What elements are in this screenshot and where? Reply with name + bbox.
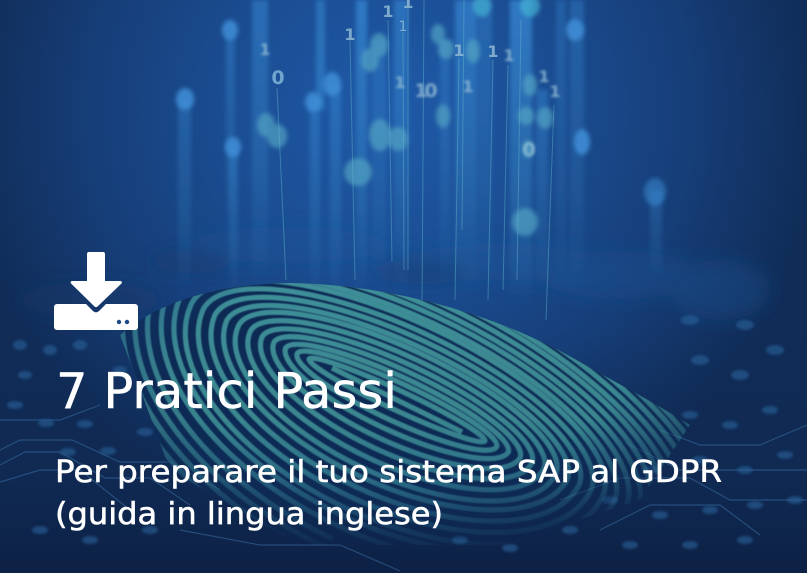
subtitle [55, 455, 722, 532]
binary digits: 1 [394, 73, 406, 92]
binary digits: 0 [271, 67, 285, 89]
binary digits: 1 [549, 82, 561, 101]
blurred landscape behind the fingerprint [20, 227, 770, 320]
thin fibre lines [277, 0, 554, 320]
glowing vertical light columns [178, 0, 662, 310]
binary digits: 1 [344, 25, 356, 44]
binary digits: 0 [522, 139, 536, 161]
icon: download [54, 252, 138, 330]
binary digits [259, 0, 561, 161]
binary digits: 1 [487, 42, 499, 61]
bottom shade [0, 330, 807, 573]
binary digits: 0 [424, 80, 438, 102]
binary digits: 1 [382, 2, 394, 21]
circuit board traces and pads [0, 315, 807, 571]
subtitle: Per preparare il tuo sistema SAP al GDPR [55, 455, 722, 490]
binary digits: 1 [414, 80, 428, 102]
fingerprint [120, 283, 690, 545]
binary digits: 1 [503, 46, 515, 65]
binary digits: 1 [399, 19, 407, 35]
binary digits: 1 [453, 41, 465, 60]
binary digits: 1 [462, 77, 474, 96]
binary digits: 1 [538, 67, 550, 86]
binary digits: 1 [259, 40, 271, 59]
title: 7 Pratici Passi [56, 363, 397, 420]
subtitle: (guida in lingua inglese) [55, 497, 443, 532]
blurred binary digits [176, 0, 666, 236]
